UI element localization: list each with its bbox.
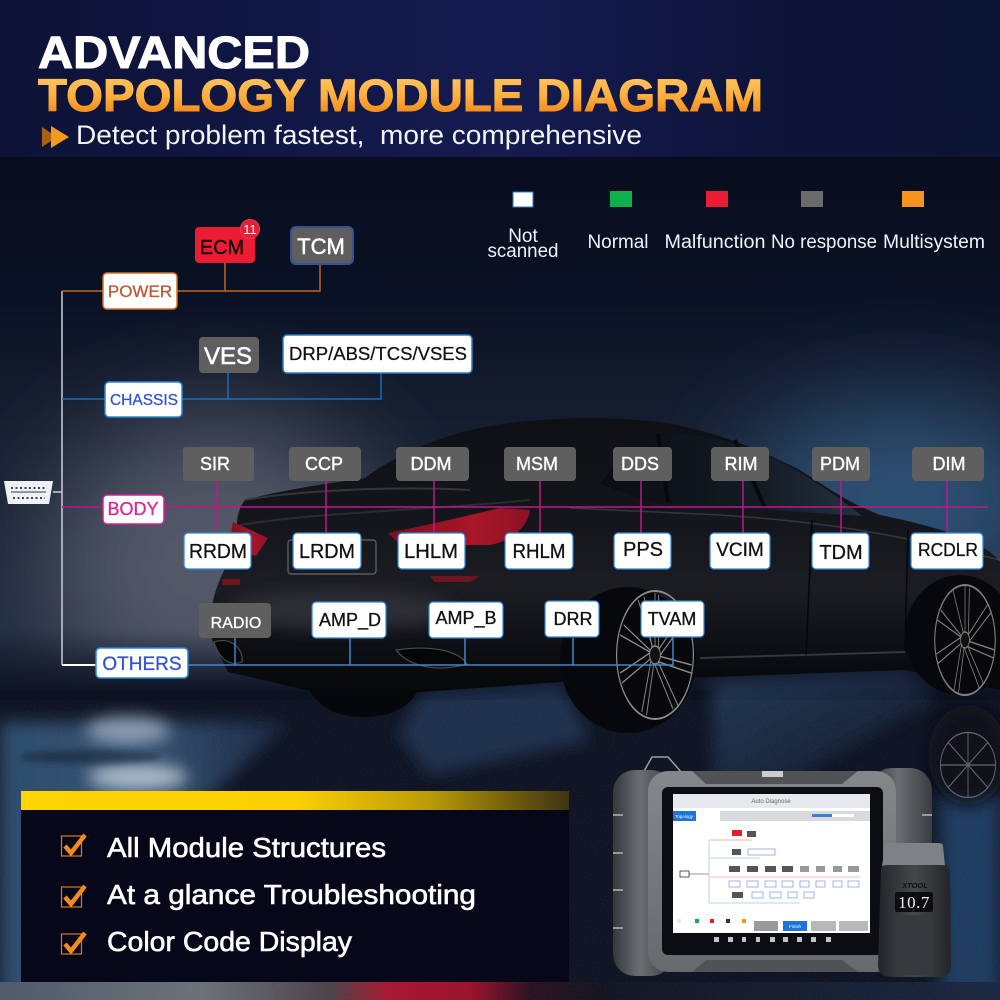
screen buttons bbox=[754, 921, 868, 931]
TCM module: TCM bbox=[297, 234, 345, 259]
white module row bbox=[184, 533, 983, 569]
not scanned bbox=[488, 192, 558, 262]
DDM bbox=[396, 447, 469, 481]
SIR: SIR bbox=[200, 454, 230, 474]
CHASSIS label: CHASSIS bbox=[110, 392, 178, 409]
normal bbox=[588, 191, 648, 253]
LHLM: LHLM bbox=[404, 541, 458, 563]
not scanned: scanned bbox=[488, 241, 558, 262]
RRDM bbox=[184, 533, 251, 569]
OTHERS label: OTHERS bbox=[102, 654, 182, 675]
not scanned: Not bbox=[508, 226, 538, 247]
feature: color code display: Color Code Display bbox=[107, 926, 352, 957]
MSM bbox=[504, 447, 576, 481]
RRDM: RRDM bbox=[189, 541, 247, 563]
RADIO: RADIO bbox=[211, 615, 261, 632]
DDS bbox=[613, 447, 672, 481]
DIM: DIM bbox=[932, 454, 966, 474]
left bumper bbox=[613, 770, 673, 976]
screen: Auto Diagnose bbox=[751, 799, 791, 805]
SIR bbox=[183, 447, 254, 481]
rear plate bbox=[288, 540, 376, 574]
title bbox=[38, 27, 763, 121]
no response: No response bbox=[771, 232, 877, 253]
PPS bbox=[614, 533, 671, 569]
DRR bbox=[545, 601, 599, 637]
taillight left bbox=[228, 522, 268, 556]
RIM bbox=[711, 447, 769, 481]
RADIO bbox=[199, 603, 271, 638]
body connectors bbox=[62, 481, 988, 533]
RCDLR: RCDLR bbox=[918, 540, 978, 560]
multisystem: Multisystem bbox=[883, 232, 985, 253]
LHLM bbox=[398, 533, 465, 569]
feature: at a glance troubleshooting: At a glance Troubleshooting bbox=[107, 879, 476, 910]
POWER label: POWER bbox=[108, 282, 172, 301]
topology diagram bbox=[4, 220, 988, 678]
rear right wheel bbox=[905, 575, 1000, 695]
others connectors bbox=[188, 638, 673, 665]
TDM bbox=[812, 533, 869, 569]
LRDM: LRDM bbox=[299, 541, 355, 563]
floor strip under panel bbox=[0, 982, 1000, 1000]
screen bbox=[673, 794, 870, 933]
rear bumper sheen bbox=[225, 590, 455, 630]
grey module row bbox=[183, 447, 984, 481]
RHLM: RHLM bbox=[512, 541, 566, 563]
BODY label: BODY bbox=[107, 499, 159, 519]
ECM module: ECM bbox=[200, 237, 244, 259]
nav icons bbox=[714, 937, 831, 942]
DIM bbox=[912, 447, 984, 481]
bezel bbox=[662, 787, 883, 955]
TVAM: TVAM bbox=[648, 609, 696, 629]
floor: lit middle bbox=[398, 684, 590, 775]
TCM module bbox=[291, 227, 353, 264]
TDM: TDM bbox=[819, 542, 863, 564]
TVAM bbox=[641, 601, 704, 637]
CCP: CCP bbox=[305, 454, 343, 474]
chassis connectors bbox=[62, 373, 381, 399]
mini topology bbox=[688, 840, 860, 903]
front wheel bbox=[560, 587, 696, 733]
AMP_D bbox=[312, 602, 386, 638]
BODY label bbox=[103, 495, 164, 524]
DRP/ABS/TCS/VSES module: DRP/ABS/TCS/VSES bbox=[289, 344, 467, 364]
DRP/ABS/TCS/VSES module bbox=[283, 335, 472, 373]
floor: lit right bbox=[712, 672, 935, 795]
DDS: DDS bbox=[621, 454, 659, 474]
right bumper bbox=[870, 768, 932, 976]
features panel bbox=[21, 791, 569, 982]
normal: Normal bbox=[588, 232, 648, 253]
malfunction: Malfunction bbox=[664, 232, 766, 253]
OBD dongle bbox=[878, 843, 951, 977]
POWER label bbox=[103, 273, 177, 309]
PPS: PPS bbox=[623, 539, 663, 561]
handle strap bbox=[643, 757, 682, 773]
header band bbox=[0, 0, 1000, 157]
CHASSIS label bbox=[105, 382, 182, 417]
RCDLR bbox=[911, 533, 983, 569]
title: TOPOLOGY MODULE DIAGRAM bbox=[38, 70, 763, 121]
others module row bbox=[199, 601, 704, 638]
VCIM: VCIM bbox=[716, 540, 764, 561]
VES module bbox=[199, 337, 259, 373]
AMP_B: AMP_B bbox=[435, 608, 497, 629]
OTHERS label bbox=[96, 648, 188, 678]
mini legend bbox=[677, 919, 746, 923]
PDM: PDM bbox=[820, 454, 860, 474]
legend bbox=[488, 191, 985, 262]
ECM module: 11 bbox=[243, 222, 257, 237]
subtitle with arrow icon: Detect problem fastest, more comprehensive bbox=[76, 120, 642, 150]
main trunk line bbox=[53, 291, 96, 665]
wheel reflection bbox=[940, 732, 996, 798]
DDM: DDM bbox=[410, 454, 452, 474]
screen: Topology bbox=[675, 814, 694, 819]
ECM module bbox=[195, 220, 260, 263]
multisystem bbox=[883, 191, 985, 253]
exhaust tips bbox=[214, 641, 467, 668]
RHLM bbox=[505, 533, 573, 569]
icon: OBD connector bbox=[4, 481, 53, 504]
malfunction bbox=[664, 191, 766, 253]
car bbox=[211, 418, 1000, 798]
MSM: MSM bbox=[516, 454, 558, 474]
OBD dongle: XTOOL bbox=[901, 881, 928, 890]
RIM: RIM bbox=[724, 454, 758, 474]
rear reflectors bbox=[222, 576, 480, 585]
title: ADVANCED bbox=[38, 27, 310, 78]
LRDM bbox=[293, 533, 361, 569]
tablet device bbox=[613, 757, 932, 976]
body bbox=[648, 771, 896, 972]
no response bbox=[771, 191, 877, 253]
OBD dongle: 10.7 bbox=[898, 893, 930, 912]
PDM bbox=[812, 447, 870, 481]
floor: lit left bbox=[0, 722, 290, 1000]
VES module: VES bbox=[204, 343, 252, 370]
feature: all module structures: All Module Structures bbox=[107, 832, 386, 863]
AMP_D: AMP_D bbox=[319, 610, 381, 631]
rear tyre bbox=[306, 680, 421, 717]
CCP bbox=[289, 447, 361, 481]
DRR: DRR bbox=[554, 609, 592, 629]
AMP_B bbox=[429, 602, 503, 638]
power connectors bbox=[62, 263, 320, 291]
screen buttons: Finish bbox=[789, 924, 801, 929]
taillight right bbox=[388, 508, 530, 545]
VCIM bbox=[710, 533, 770, 569]
